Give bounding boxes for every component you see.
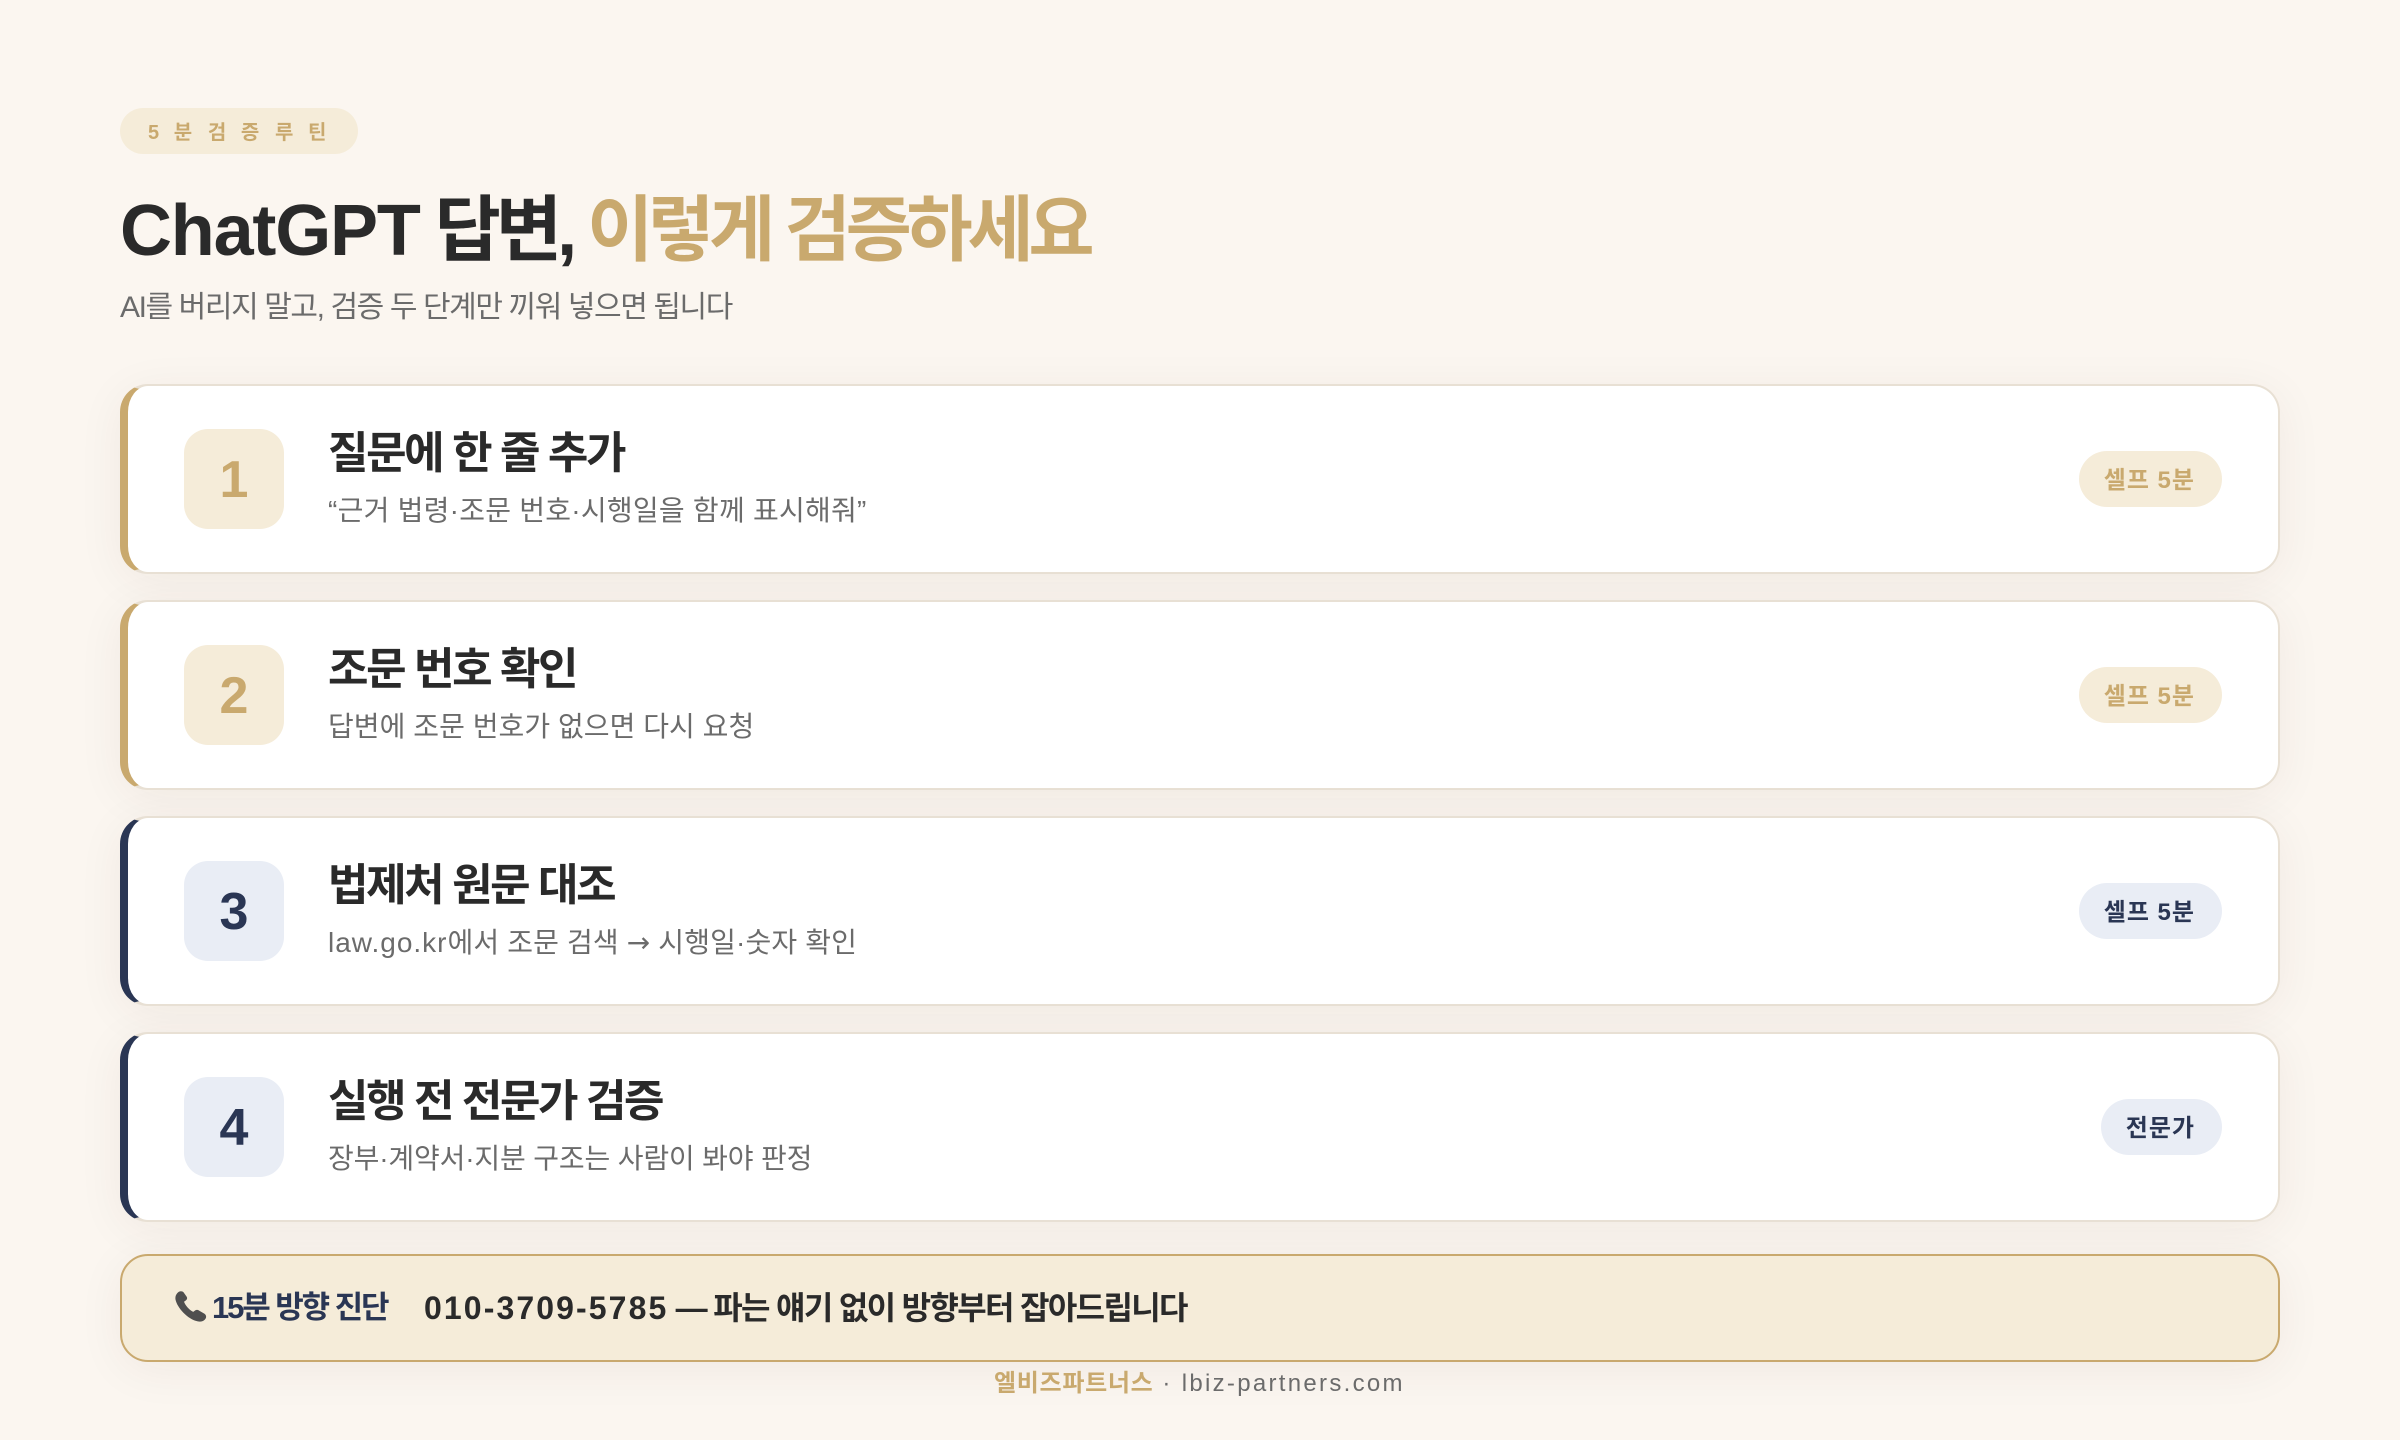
- icon: telephone: [175, 1291, 206, 1322]
- step number 2: [184, 645, 284, 745]
- badge: 5분 검증 루틴: [120, 108, 358, 154]
- step 1 heading: 질문에 한 줄 추가: [328, 429, 624, 478]
- panel: step 2: [120, 600, 2280, 790]
- step 2 tag: [2079, 667, 2222, 723]
- step 1 tag: [2079, 451, 2222, 507]
- step number 1: 1: [220, 451, 248, 509]
- step 4 description: 장부·계약서·지분 구조는 사람이 봐야 판정: [328, 1143, 812, 1174]
- call to action message: 010-3709-5785 — 파는 얘기 없이 방향부터 잡아드립니다: [424, 1290, 1187, 1326]
- step 1 tag: 셀프 5분: [2104, 467, 2195, 494]
- step 1 description: “근거 법령·조문 번호·시행일을 함께 표시해줘”: [328, 495, 867, 526]
- step number 4: 4: [220, 1099, 248, 1157]
- step 3 tag: 셀프 5분: [2104, 899, 2195, 926]
- badge: 5분 검증 루틴: 5분 검증 루틴: [148, 122, 341, 144]
- panel: step 4: [120, 1032, 2280, 1222]
- panel: call to action: [120, 1254, 2280, 1362]
- step 3 heading: 법제처 원문 대조: [328, 861, 614, 910]
- step 3 description: law.go.kr에서 조문 검색 → 시행일·숫자 확인: [328, 926, 857, 959]
- step number 3: 3: [220, 883, 248, 941]
- step 2 description: 답변에 조문 번호가 없으면 다시 요청: [328, 711, 754, 742]
- call to action label: 15분 방향 진단: [212, 1290, 387, 1325]
- step 3 tag: [2079, 883, 2222, 939]
- step number 1: [184, 429, 284, 529]
- step 4 tag: 전문가: [2126, 1115, 2195, 1142]
- subtitle: AI를 버리지 말고, 검증 두 단계만 끼워 넣으면 됩니다: [120, 291, 732, 324]
- step 4 heading: 실행 전 전문가 검증: [328, 1077, 662, 1126]
- panel: step 3: [120, 816, 2280, 1006]
- step number 4: [184, 1077, 284, 1177]
- step 4 tag: [2101, 1099, 2222, 1155]
- footer: 엘비즈파트너스 · lbiz-partners.com: [994, 1370, 1405, 1397]
- step 2 heading: 조문 번호 확인: [328, 645, 576, 694]
- panel: step 1: [120, 384, 2280, 574]
- step number 3: [184, 861, 284, 961]
- title: ChatGPT 답변, 이렇게 검증하세요: [120, 191, 1089, 271]
- step number 2: 2: [220, 667, 248, 725]
- step 2 tag: 셀프 5분: [2104, 683, 2195, 710]
